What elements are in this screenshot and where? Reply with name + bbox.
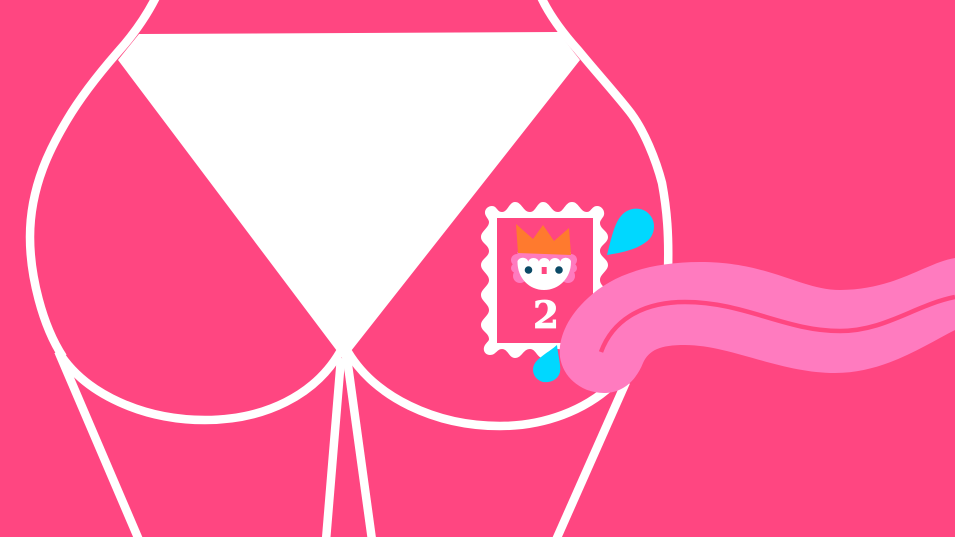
body outline [30,0,668,537]
right eye [555,266,563,274]
right leg line [556,382,626,537]
right hip outline [541,0,668,270]
tongue [560,258,955,393]
character portrait [511,224,577,290]
left leg line [59,353,139,537]
right buttock curve [348,352,612,426]
inner right thigh line [347,358,372,537]
left eye [525,266,532,274]
inner left thigh line [326,358,341,537]
left hip outline [30,0,156,357]
tongue centre line [601,297,955,352]
left buttock curve [58,351,340,420]
icon: lower water drop [533,345,560,382]
nose [542,267,547,274]
crown [516,224,571,255]
curly side hair [511,254,577,283]
stamp [481,202,608,358]
stamp perforated border [481,202,608,358]
tongue body [560,258,955,393]
stamp number: 2 [533,293,559,337]
white underwear triangle [118,32,580,362]
fringe [518,252,571,262]
stamp inner panel [497,218,593,343]
face [518,254,571,290]
icon: upper water drop [607,209,654,255]
